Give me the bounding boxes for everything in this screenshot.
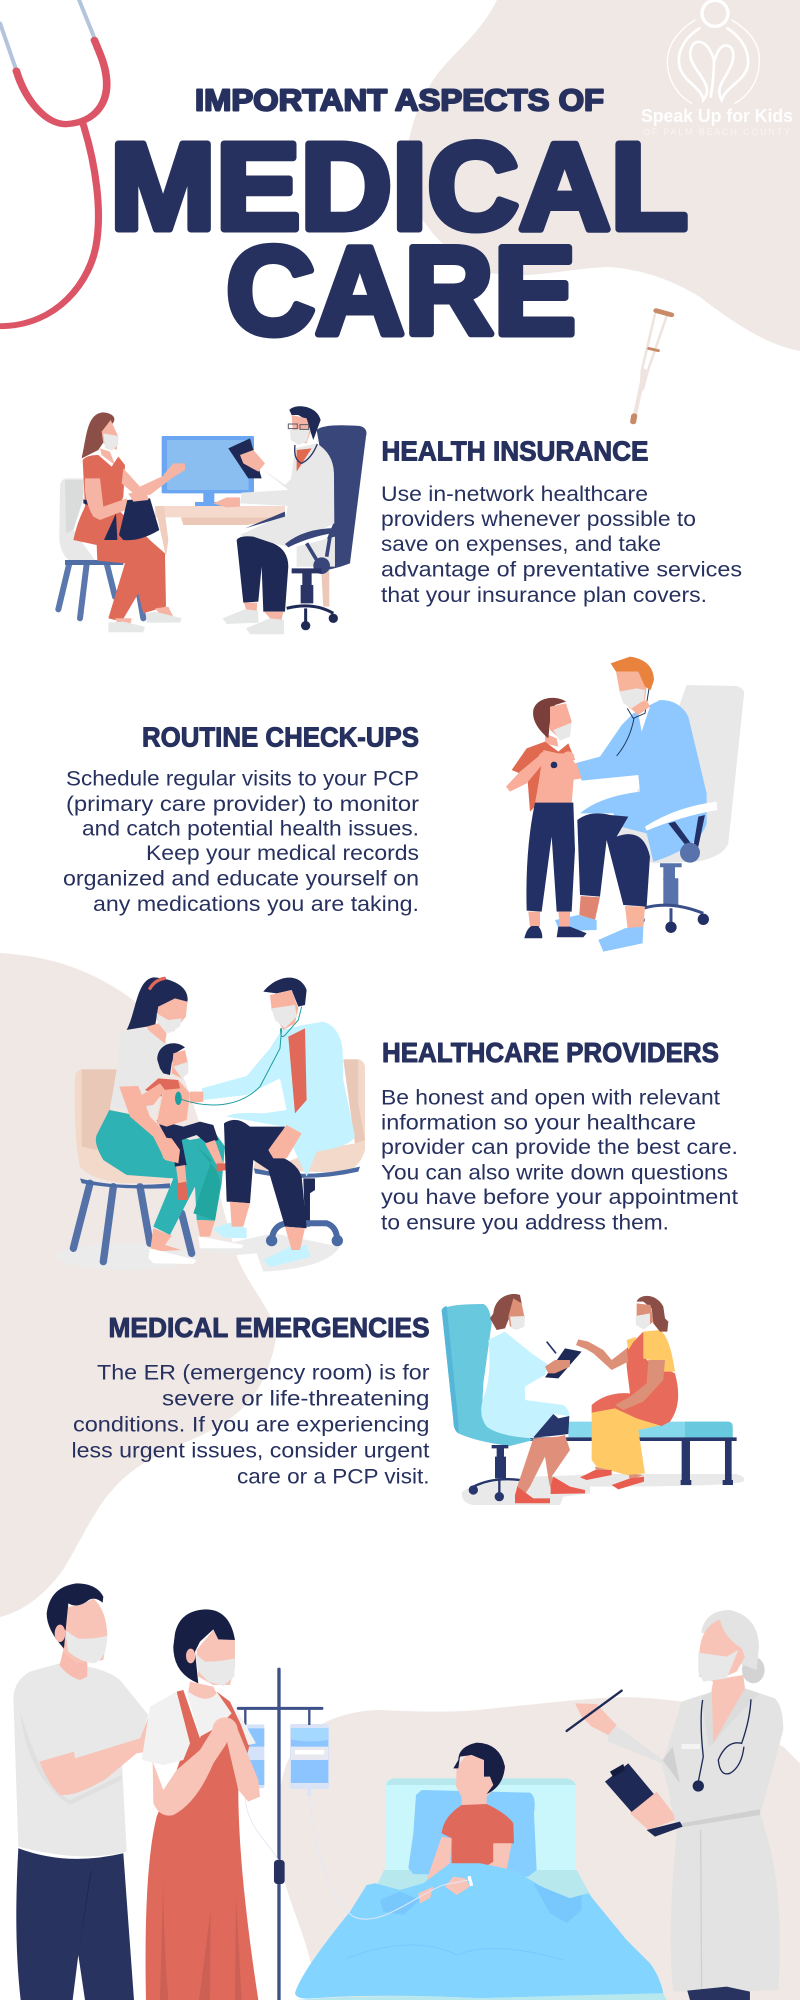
text: medical emergencies: less urgent issues, consider urgent bbox=[72, 1440, 430, 1462]
title: MEDICAL bbox=[110, 119, 688, 256]
text: healthcare providers: You can also write down questions bbox=[381, 1162, 728, 1184]
panel: routine check-ups bbox=[63, 657, 744, 952]
text: routine check-ups: any medications you are taking. bbox=[93, 893, 419, 916]
icon: stethoscope bbox=[0, 0, 107, 326]
illustration: doctor and patient on a bench bbox=[442, 1294, 744, 1505]
background blob: middle left bbox=[0, 953, 276, 1617]
heading: medical emergencies: MEDICAL EMERGENCIES bbox=[108, 1312, 430, 1343]
text: healthcare providers bbox=[381, 1086, 738, 1234]
father bbox=[13, 1583, 178, 2000]
text: medical emergencies bbox=[72, 1362, 430, 1488]
IV stand and drip bags bbox=[238, 1669, 329, 2000]
logo: Speak Up for Kids: Speak Up for Kids bbox=[641, 106, 793, 126]
mother bbox=[142, 1609, 260, 2000]
text: routine check-ups: organized and educate yourself on bbox=[63, 868, 419, 890]
heading: health insurance: HEALTH INSURANCE bbox=[382, 436, 648, 466]
logo: Speak Up for Kids bbox=[641, 0, 793, 137]
text: routine check-ups: Schedule regular visits to your PCP bbox=[66, 768, 419, 790]
text: medical emergencies: severe or life-threatening bbox=[162, 1388, 430, 1410]
background blob: bottom right bbox=[278, 1697, 800, 2000]
text: healthcare providers: provider can provide the best care. bbox=[381, 1136, 738, 1159]
title bbox=[110, 82, 688, 361]
text: healthcare providers: Be honest and open with relevant bbox=[381, 1086, 720, 1110]
panel: medical emergencies bbox=[72, 1294, 744, 1505]
text: healthcare providers: you have before your appointment bbox=[381, 1186, 738, 1209]
illustration: doctor examining a child bbox=[506, 657, 744, 952]
panel: health insurance bbox=[58, 406, 742, 634]
illustration: mother and child with doctor bbox=[57, 977, 365, 1272]
text: medical emergencies: The ER (emergency room) is for bbox=[97, 1362, 430, 1384]
text: routine check-ups: (primary care provider) to monitor bbox=[66, 793, 419, 816]
text: health insurance: that your insurance plan covers. bbox=[381, 584, 707, 607]
text: healthcare providers: to ensure you address them. bbox=[381, 1212, 669, 1234]
doctor with clipboard bbox=[567, 1610, 783, 2000]
text: routine check-ups: and catch potential health issues. bbox=[82, 818, 419, 840]
text: routine check-ups bbox=[63, 768, 419, 916]
text: routine check-ups: Keep your medical records bbox=[146, 842, 419, 865]
heading: routine check-ups: ROUTINE CHECK-UPS bbox=[142, 722, 419, 752]
text: healthcare providers: information so your healthcare bbox=[381, 1112, 696, 1134]
text: health insurance: save on expenses, and take bbox=[381, 533, 661, 556]
title: IMPORTANT ASPECTS OF bbox=[195, 82, 604, 118]
text: health insurance: Use in-network healthcare bbox=[381, 483, 648, 506]
logo: Speak Up for Kids: OF PALM BEACH COUNTY bbox=[643, 127, 790, 137]
background blob: top right bbox=[406, 0, 800, 351]
illustration: hospital bedside scene bbox=[13, 1583, 783, 2000]
text: health insurance bbox=[381, 483, 742, 607]
illustration: patient and doctor at a desk bbox=[58, 406, 366, 634]
panel: healthcare providers bbox=[57, 977, 738, 1272]
icon: crutch bbox=[633, 311, 671, 422]
title: CARE bbox=[226, 222, 576, 361]
text: medical emergencies: care or a PCP visit. bbox=[237, 1466, 430, 1488]
hospital bed with child bbox=[295, 1743, 667, 2000]
text: health insurance: advantage of preventative services bbox=[381, 558, 742, 582]
text: medical emergencies: conditions. If you are experiencing bbox=[73, 1414, 430, 1436]
heading: healthcare providers: HEALTHCARE PROVIDERS bbox=[382, 1037, 719, 1068]
text: health insurance: providers whenever possible to bbox=[381, 508, 696, 531]
